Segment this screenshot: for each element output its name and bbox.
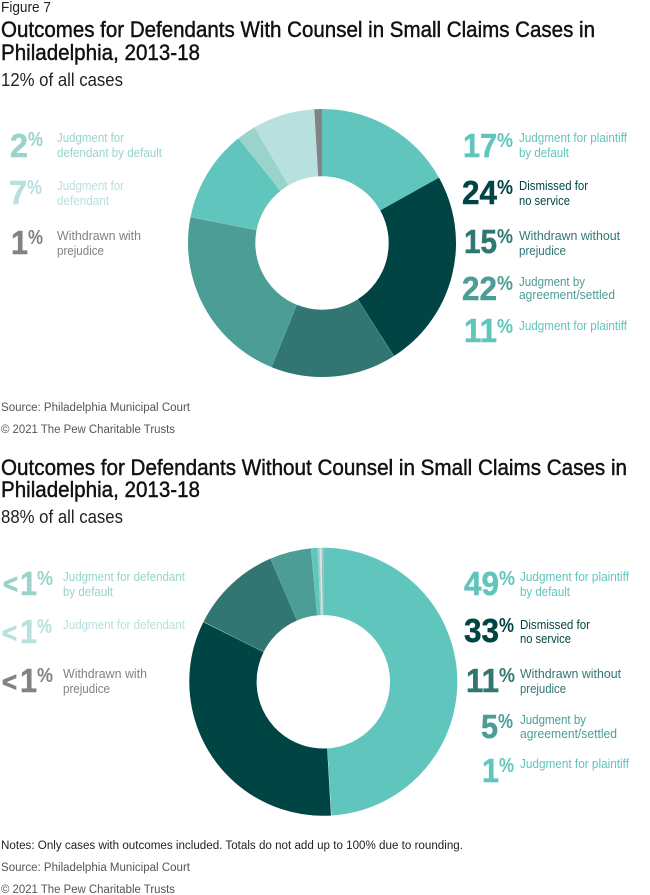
item: 11% judgment for plaintiff: % — [497, 315, 513, 338]
title: without counsel: Philadelphia, 2013-18 — [1, 477, 200, 502]
item: 17% judgment for plaintiff by default: % — [497, 129, 513, 152]
item: 2% judgment for defendant by default: Judgment for — [57, 131, 124, 145]
item: 15% withdrawn without prejudice: Withdrawn without — [519, 229, 621, 243]
legend: with counsel, right — [462, 127, 627, 349]
item: 24% dismissed for no service — [462, 174, 588, 211]
item: 5% judgment by agreement/settled: Judgment by — [520, 713, 587, 727]
item: 1% withdrawn with prejudice: prejudice — [57, 244, 104, 258]
item: 1% withdrawn with prejudice — [11, 224, 141, 261]
title: with counsel: Philadelphia, 2013-18 — [1, 40, 200, 65]
donut chart: without counsel — [189, 547, 458, 816]
item: 7% judgment for defendant: % — [27, 176, 42, 199]
notes and source: second chart: Notes: Only cases with outcomes included. Totals do not add up to 100% due to rounding. — [1, 840, 463, 852]
item: less than 1% withdrawn with prejudice — [2, 662, 147, 699]
notes and source: second chart — [1, 840, 463, 895]
item: less than 1% judgment for defendant by default: % — [37, 567, 53, 590]
item: 15% withdrawn without prejudice: prejudice — [519, 244, 566, 258]
item: 22% judgment by agreement/settled: % — [497, 272, 513, 295]
item: 49% judgment for plaintiff by default — [464, 565, 629, 602]
item: 24% dismissed for no service: % — [497, 176, 513, 199]
item: 49% judgment for plaintiff by default: % — [499, 567, 515, 590]
notes and source: second chart: Source: Philadelphia Municipal Court — [1, 862, 191, 874]
item: 7% judgment for defendant: 7 — [9, 174, 27, 211]
item: 11% withdrawn without prejudice: prejudice — [520, 682, 566, 696]
item: 15% withdrawn without prejudice: % — [497, 225, 513, 248]
source note: first chart: Source: Philadelphia Municipal Court — [1, 402, 191, 414]
item: 11% judgment for plaintiff: 11 — [464, 312, 497, 349]
item: 11% withdrawn without prejudice: Withdrawn without — [520, 667, 622, 681]
item: 5% judgment by agreement/settled — [481, 708, 617, 745]
item: less than 1% judgment for defendant by default: < — [3, 569, 18, 599]
item: 33% dismissed for no service: Dismissed for — [520, 618, 590, 632]
item: 1% judgment for plaintiff: % — [499, 754, 514, 777]
item: 7% judgment for defendant — [9, 174, 124, 211]
item: 15% withdrawn without prejudice: 15 — [464, 223, 497, 260]
item: 11% withdrawn without prejudice: % — [499, 664, 515, 687]
item: 49% judgment for plaintiff by default: 49 — [464, 565, 499, 602]
item: 5% judgment by agreement/settled: 5 — [481, 708, 498, 745]
item: less than 1% judgment for defendant: < — [2, 618, 17, 648]
item: 17% judgment for plaintiff by default — [463, 127, 627, 164]
item: 5% judgment by agreement/settled: agreement/settled — [520, 727, 617, 741]
item: 11% judgment for plaintiff: Judgment for plaintiff — [519, 319, 627, 333]
item: less than 1% judgment for defendant: Judgment for defendant — [63, 618, 185, 632]
item: 1% judgment for plaintiff: Judgment for plaintiff — [520, 757, 629, 771]
item: 22% judgment by agreement/settled: agreement/settled — [519, 288, 615, 302]
legend: without counsel, left — [2, 565, 185, 699]
item: 2% judgment for defendant by default: 2 — [10, 127, 28, 164]
item: 24% dismissed for no service: Dismissed for — [519, 179, 588, 193]
item: 33% dismissed for no service: % — [499, 614, 514, 637]
item: less than 1% withdrawn with prejudice: % — [37, 664, 53, 687]
item: 2% judgment for defendant by default: % — [28, 128, 43, 151]
item: 1% judgment for plaintiff: 1 — [482, 752, 499, 789]
item: less than 1% withdrawn with prejudice: < — [2, 667, 17, 697]
item: less than 1% judgment for defendant by default: Judgment for defendant — [63, 570, 185, 584]
item: 1% judgment for plaintiff — [482, 752, 629, 789]
item: less than 1% withdrawn with prejudice: prejudice — [63, 682, 110, 696]
item: 17% judgment for plaintiff by default: Judgment for plaintiff — [519, 131, 627, 145]
item: 1% withdrawn with prejudice: Withdrawn with — [57, 229, 141, 243]
title: without counsel — [1, 455, 627, 502]
source note: first chart: © 2021 The Pew Charitable Trusts — [1, 424, 175, 436]
item: less than 1% withdrawn with prejudice: Withdrawn with — [63, 667, 147, 681]
item: 2% judgment for defendant by default — [10, 127, 162, 164]
item: 11% judgment for plaintiff — [464, 312, 627, 349]
item: 17% judgment for plaintiff by default: by default — [519, 146, 569, 160]
item: less than 1% judgment for defendant by default: by default — [63, 585, 113, 599]
source note: first chart — [1, 402, 191, 436]
item: less than 1% judgment for defendant: 1 — [20, 613, 37, 650]
subtitle: 12% of all cases: 12% of all cases — [1, 70, 123, 90]
item: less than 1% judgment for defendant: % — [37, 615, 52, 638]
item: less than 1% judgment for defendant — [2, 613, 185, 650]
donut chart: with counsel — [181, 102, 463, 384]
title: with counsel — [1, 17, 595, 65]
item: less than 1% judgment for defendant by default — [3, 565, 185, 602]
item: 5% judgment by agreement/settled: % — [498, 710, 513, 733]
item: 17% judgment for plaintiff by default: 17 — [463, 127, 497, 164]
item: 22% judgment by agreement/settled: 22 — [462, 270, 497, 307]
item: 15% withdrawn without prejudice — [464, 223, 621, 260]
item: 49% judgment for plaintiff by default: by default — [520, 585, 570, 599]
item: 33% dismissed for no service: no service — [520, 632, 571, 646]
item: 7% judgment for defendant: defendant — [57, 194, 109, 208]
item: less than 1% judgment for defendant by default: 1 — [20, 565, 37, 602]
title: with counsel: Outcomes for Defendants With Counsel in Small Claims Cases in — [1, 17, 595, 42]
item: 22% judgment by agreement/settled — [462, 270, 615, 307]
item: 33% dismissed for no service — [464, 612, 590, 649]
item: 22% judgment by agreement/settled: Judgment by — [519, 275, 586, 289]
item: 1% withdrawn with prejudice: 1 — [11, 224, 28, 261]
item: 2% judgment for defendant by default: defendant by default — [57, 146, 162, 160]
item: 49% judgment for plaintiff by default: Judgment for plaintiff — [520, 570, 629, 584]
item: 24% dismissed for no service: 24 — [462, 174, 498, 211]
item: 1% withdrawn with prejudice: % — [28, 226, 43, 249]
legend: without counsel, right — [464, 565, 629, 789]
item: 11% withdrawn without prejudice — [466, 662, 622, 699]
item: less than 1% withdrawn with prejudice: 1 — [20, 662, 37, 699]
subtitle: 88% of all cases: 88% of all cases — [1, 507, 123, 527]
item: 11% withdrawn without prejudice: 11 — [466, 662, 499, 699]
legend: with counsel, left — [9, 127, 162, 261]
item: 24% dismissed for no service: no service — [519, 194, 570, 208]
item: 7% judgment for defendant: Judgment for — [57, 179, 124, 193]
item: 33% dismissed for no service: 33 — [464, 612, 499, 649]
